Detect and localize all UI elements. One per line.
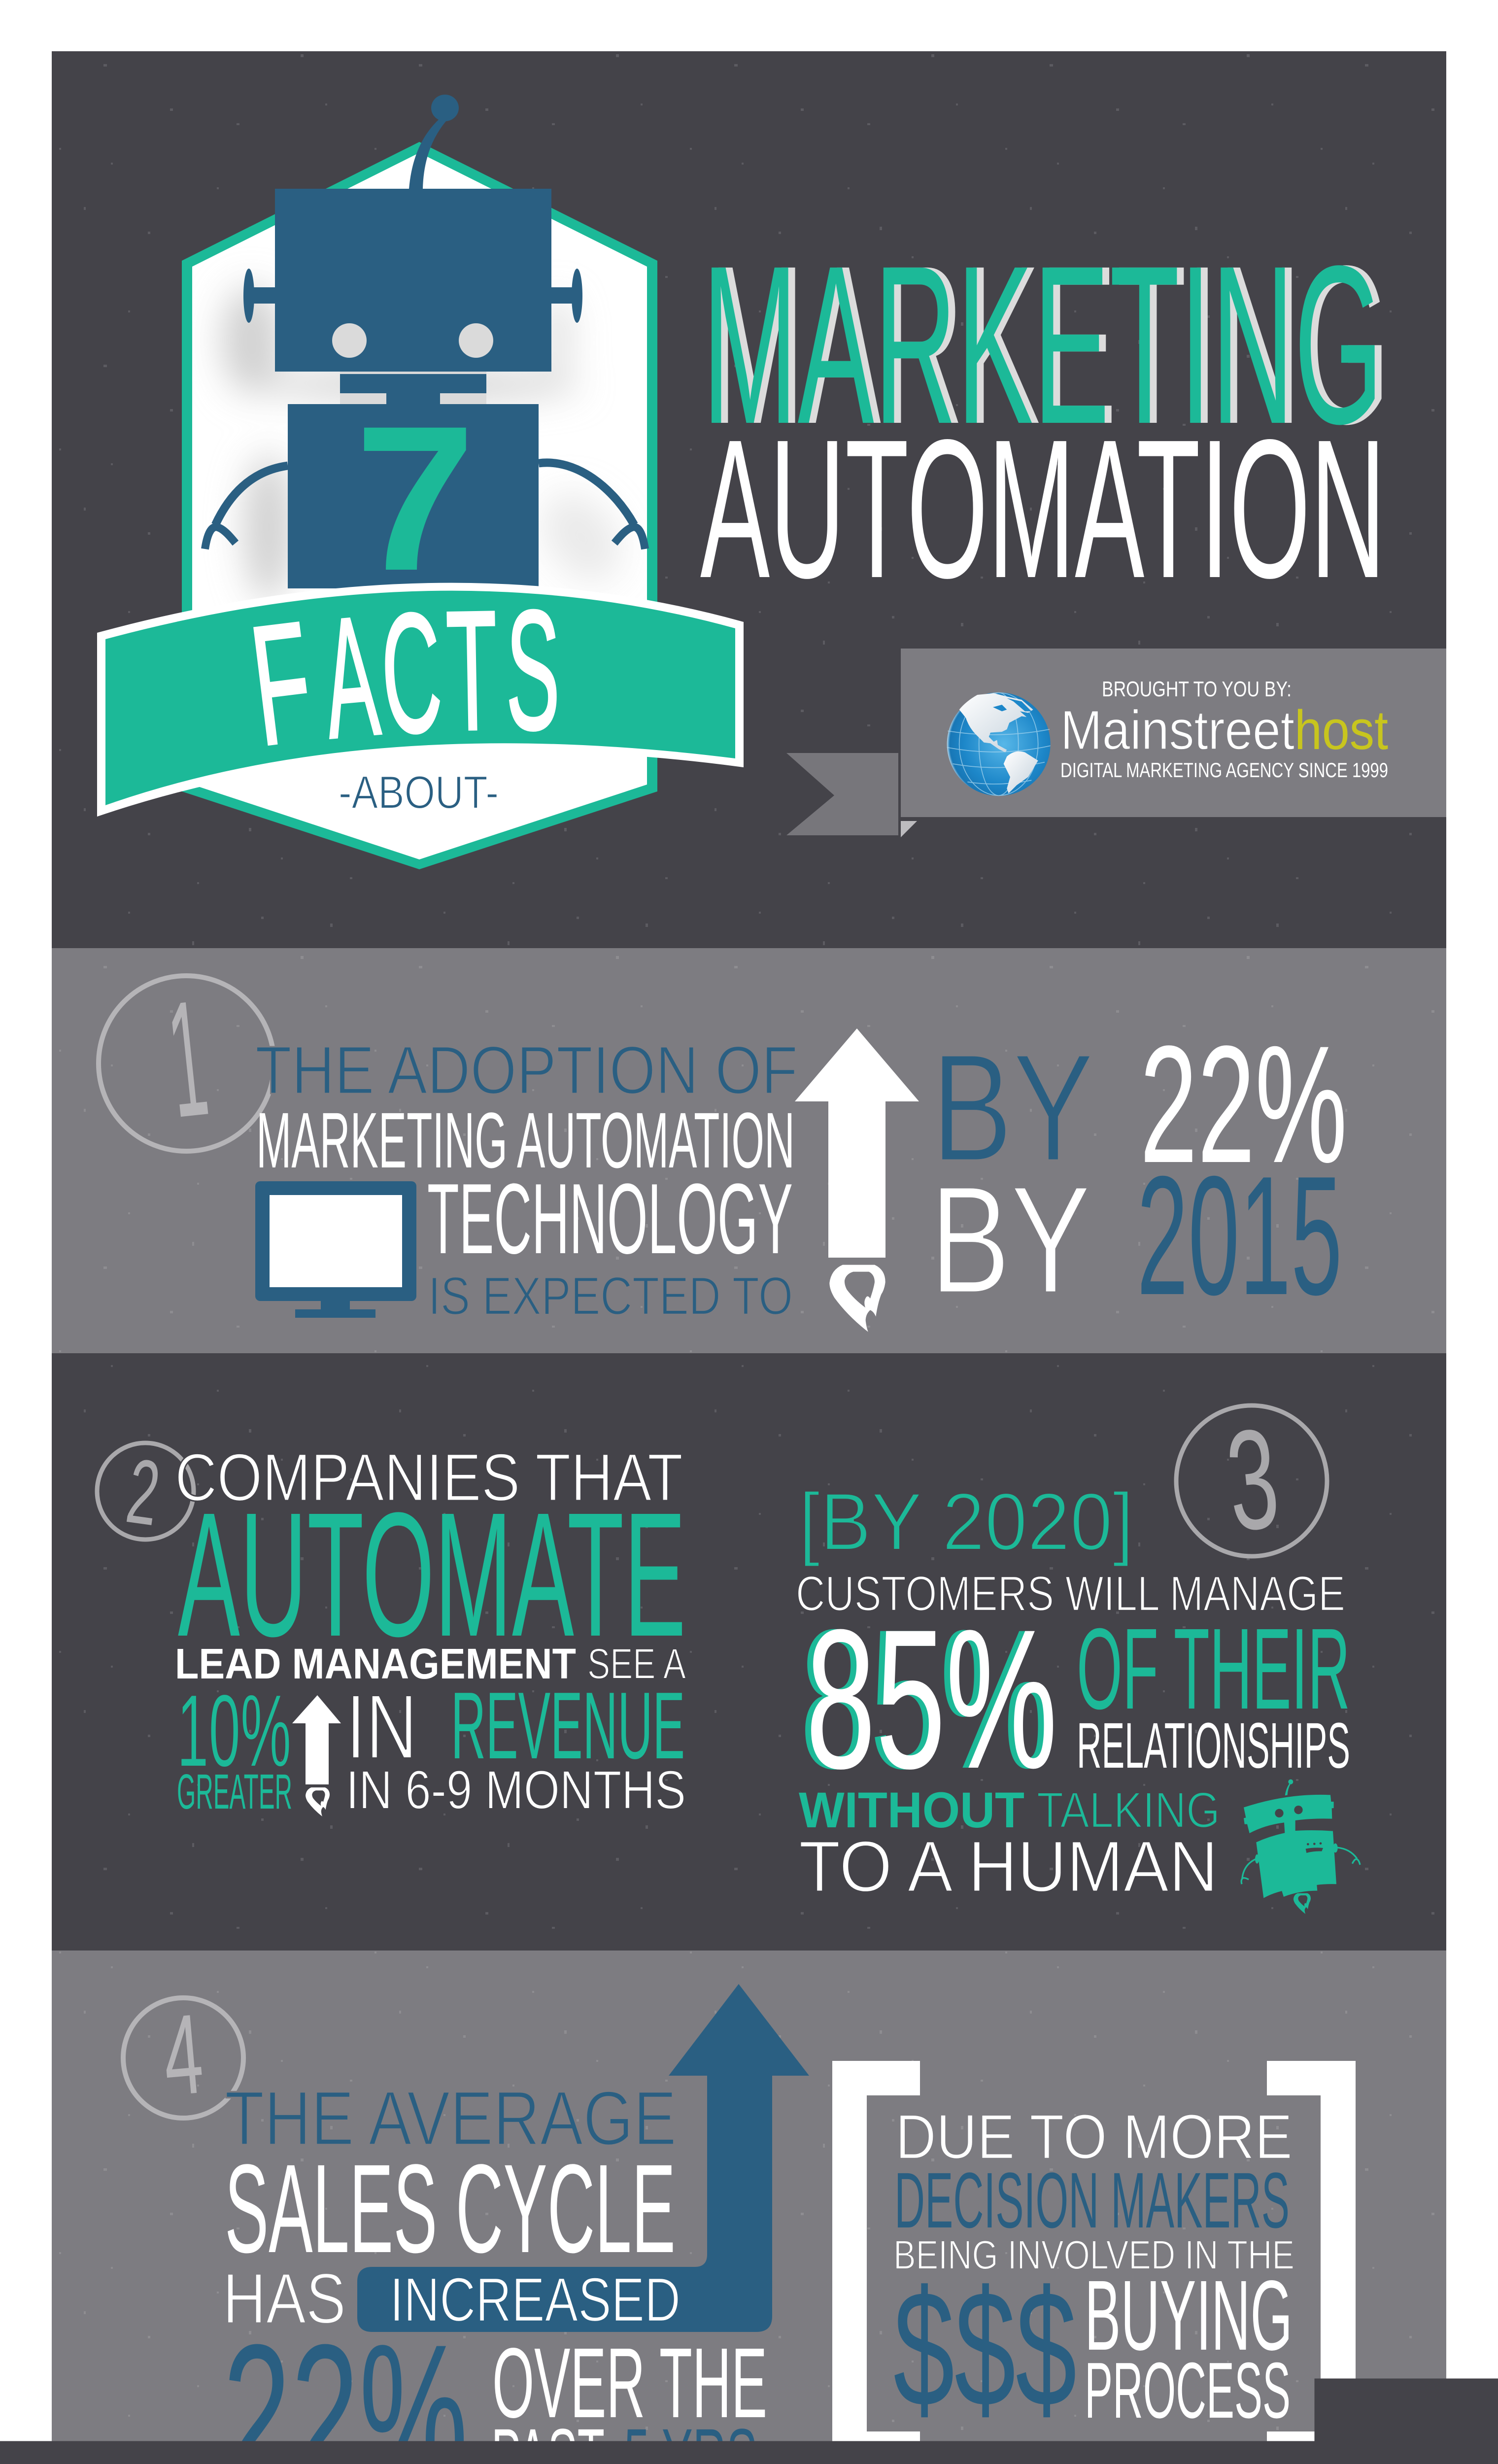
icon: globe bbox=[947, 692, 1051, 796]
text: the average: THE AVERAGE bbox=[225, 2076, 677, 2161]
text: increased: INCREASED bbox=[390, 2265, 681, 2334]
banner heading: FACTS: C bbox=[377, 577, 446, 770]
text: by (white): BY bbox=[930, 1154, 1091, 1325]
text: has: HAS bbox=[223, 2259, 346, 2338]
text: brought to you by: BROUGHT TO YOU BY: bbox=[1102, 677, 1292, 701]
text: technology: TECHNOLOGY bbox=[427, 1163, 793, 1275]
label: ABOUT: -ABOUT- bbox=[339, 766, 499, 818]
panel: header bbox=[97, 95, 1446, 869]
stat: 85%: 85% bbox=[800, 1588, 1052, 1810]
number badge 3 bbox=[1176, 1399, 1327, 1561]
stat: 22%: 22% bbox=[1140, 1011, 1347, 1198]
panel: fact 1 bbox=[52, 948, 1446, 1353]
number badge 4 bbox=[123, 1990, 243, 2120]
numeral 7: 7 bbox=[355, 383, 476, 614]
text: the adoption of: THE ADOPTION OF bbox=[255, 1032, 798, 1108]
icon: monitor bbox=[255, 1181, 416, 1318]
logo text: Mainstreet: Mainstreet bbox=[1060, 699, 1294, 761]
text: agency tagline: DIGITAL MARKETING AGENCY SINCE 1999 bbox=[1060, 758, 1388, 782]
number badge 3: 3 bbox=[1220, 1399, 1286, 1561]
text: companies that: COMPANIES THAT bbox=[175, 1440, 683, 1515]
sponsor ribbon bbox=[786, 649, 1446, 837]
icon text: dollar signs: $$$ bbox=[893, 2257, 1077, 2441]
number badge 1: 1 bbox=[161, 965, 215, 1152]
text: buying: BUYING bbox=[1085, 2259, 1293, 2371]
heading: automate: AUTOMATE bbox=[178, 1476, 686, 1674]
banner heading: FACTS: F bbox=[242, 586, 321, 782]
icon: small teal robot bbox=[1241, 1780, 1360, 1914]
panel: fact 2: GREATER bbox=[177, 1764, 292, 1819]
logo text: host: host bbox=[1294, 699, 1388, 761]
arrow: rocket bbox=[795, 1028, 919, 1332]
icon: blue robot bbox=[205, 95, 645, 588]
text: without: WITHOUT bbox=[799, 1782, 1024, 1838]
banner heading: FACTS: A bbox=[316, 581, 385, 774]
panel: fact 3 bbox=[796, 1399, 1360, 1914]
panel: fact 4 bbox=[52, 1951, 1446, 2464]
text: to a human: TO A HUMAN bbox=[799, 1826, 1218, 1907]
bracket pair bbox=[832, 2061, 1356, 2464]
arrow: big blue rising arrow bbox=[357, 1984, 809, 2332]
text: by (blue): BY bbox=[931, 1022, 1094, 1193]
title: Marketing Automation bbox=[700, 219, 1390, 619]
badge: shield with robot: S bbox=[506, 576, 560, 765]
banner bbox=[97, 583, 744, 817]
number badge 2: 2 bbox=[121, 1440, 166, 1545]
arrow: small rocket bbox=[292, 1695, 341, 1816]
text: see a: SEE A bbox=[587, 1640, 686, 1688]
text: being involved in the: BEING INVOLVED IN THE bbox=[893, 2232, 1294, 2278]
text: due to more: DUE TO MORE bbox=[895, 2102, 1293, 2172]
text: in: IN bbox=[346, 1676, 417, 1778]
text: over the: OVER THE bbox=[492, 2327, 767, 2438]
text: sales cycle: SALES CYCLE bbox=[225, 2138, 676, 2279]
shield outline bbox=[182, 142, 657, 869]
text: lead management: LEAD MANAGEMENT bbox=[175, 1640, 576, 1688]
text: talking: TALKING bbox=[1037, 1782, 1220, 1838]
number badge 2 bbox=[97, 1440, 194, 1545]
text: by 2020: [BY 2020] bbox=[799, 1476, 1134, 1568]
shield inner bbox=[192, 153, 647, 859]
stat: 85% bbox=[800, 1588, 1057, 1810]
text: customers will manage: CUSTOMERS WILL MANAGE bbox=[796, 1566, 1345, 1621]
stat: 10%: 10% bbox=[177, 1674, 291, 1788]
number badge 1 bbox=[99, 965, 274, 1152]
text: is expected to: IS EXPECTED TO bbox=[428, 1266, 793, 1326]
stat: 85%: 85% bbox=[806, 1588, 1057, 1810]
text: revenue: REVENUE bbox=[451, 1672, 685, 1779]
panel: fact 2 bbox=[97, 1440, 686, 1820]
number badge 4: 4 bbox=[158, 1990, 207, 2120]
text: process: PROCESS bbox=[1085, 2346, 1291, 2435]
text: in 6-9 months: IN 6-9 MONTHS bbox=[346, 1760, 686, 1820]
text: marketing automation: MARKETING AUTOMATION bbox=[256, 1096, 795, 1184]
banner heading: FACTS: T bbox=[445, 576, 499, 766]
badge: shield with robot bbox=[97, 95, 744, 869]
banner heading: FACTS bbox=[242, 576, 560, 782]
